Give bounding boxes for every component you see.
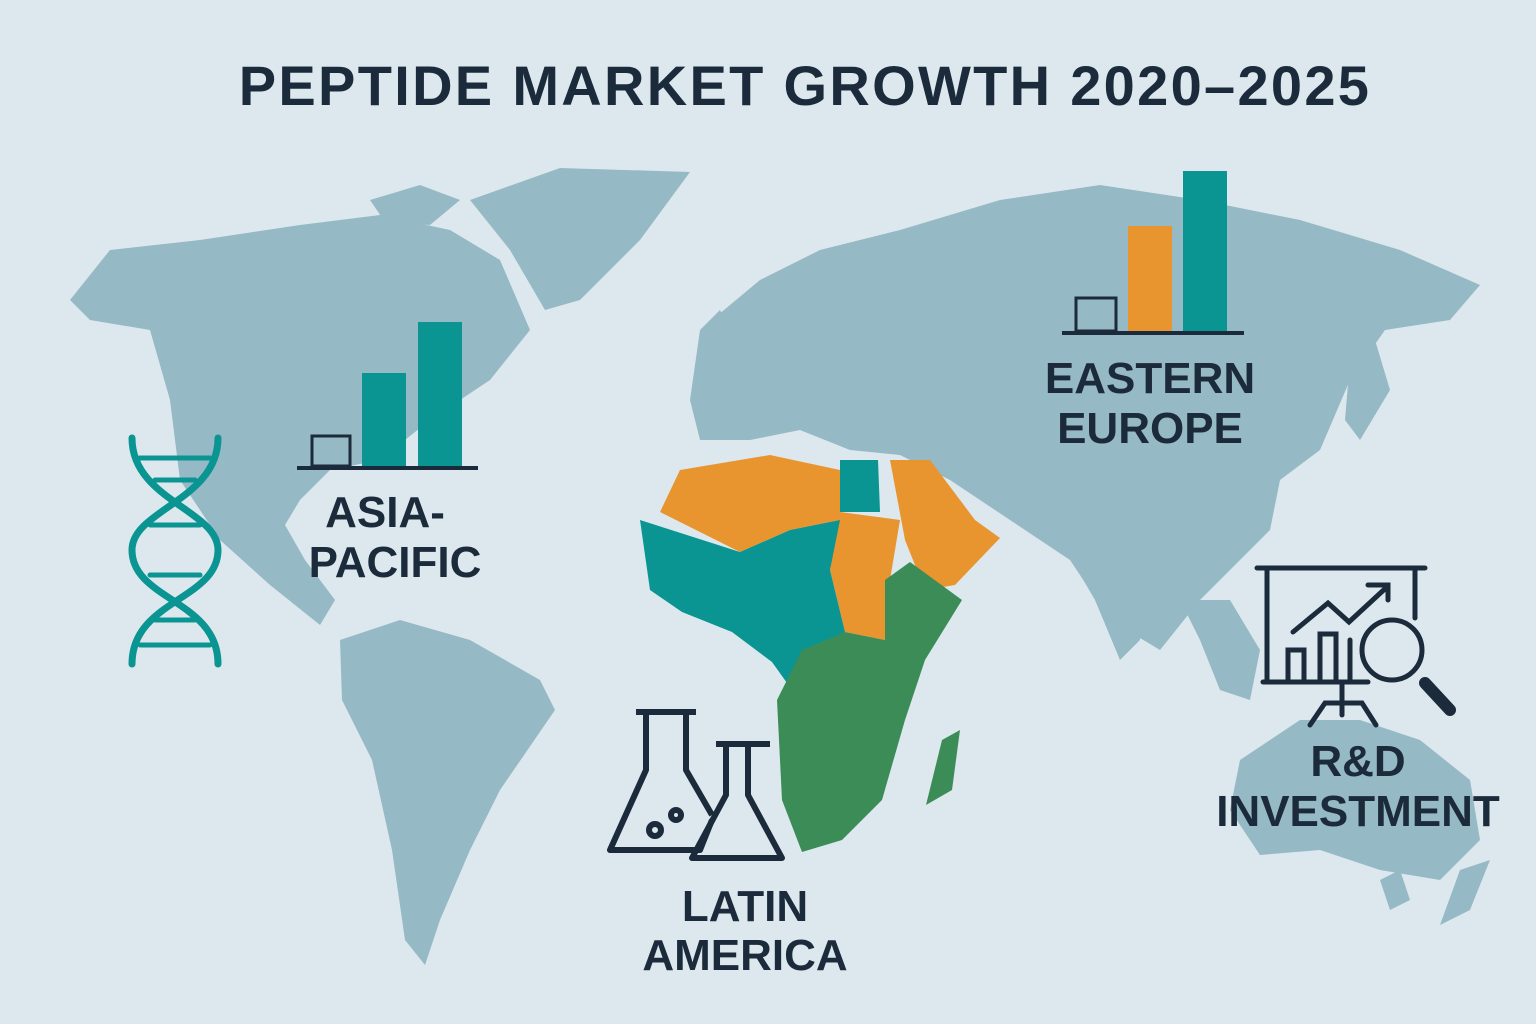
bar chart: Eastern Europe xyxy=(1062,171,1244,335)
label: Asia-Pacific: ASIA- xyxy=(325,488,445,537)
label: Eastern Europe: EUROPE xyxy=(1057,404,1243,453)
label: Eastern Europe: EASTERN xyxy=(1045,354,1255,403)
label: Asia-Pacific: PACIFIC xyxy=(309,538,481,587)
world map xyxy=(70,168,1490,965)
label: Asia-Pacific xyxy=(309,488,481,587)
label: Latin America xyxy=(642,882,848,980)
label: R&D Investment: R&D xyxy=(1310,737,1406,786)
label: R&D Investment xyxy=(1216,737,1500,836)
label: Latin America: AMERICA xyxy=(642,931,848,980)
title: PEPTIDE MARKET GROWTH 2020–2025 xyxy=(239,54,1371,117)
bar chart: Asia-Pacific xyxy=(297,322,478,470)
label: R&D Investment: INVESTMENT xyxy=(1216,787,1500,836)
label: Eastern Europe xyxy=(1045,354,1255,453)
icon: flasks xyxy=(610,712,782,858)
label: Latin America: LATIN xyxy=(682,882,808,931)
africa and middle east regions xyxy=(640,455,1000,852)
icon: DNA helix xyxy=(132,438,218,664)
icon: R&D presentation board xyxy=(1257,568,1450,725)
